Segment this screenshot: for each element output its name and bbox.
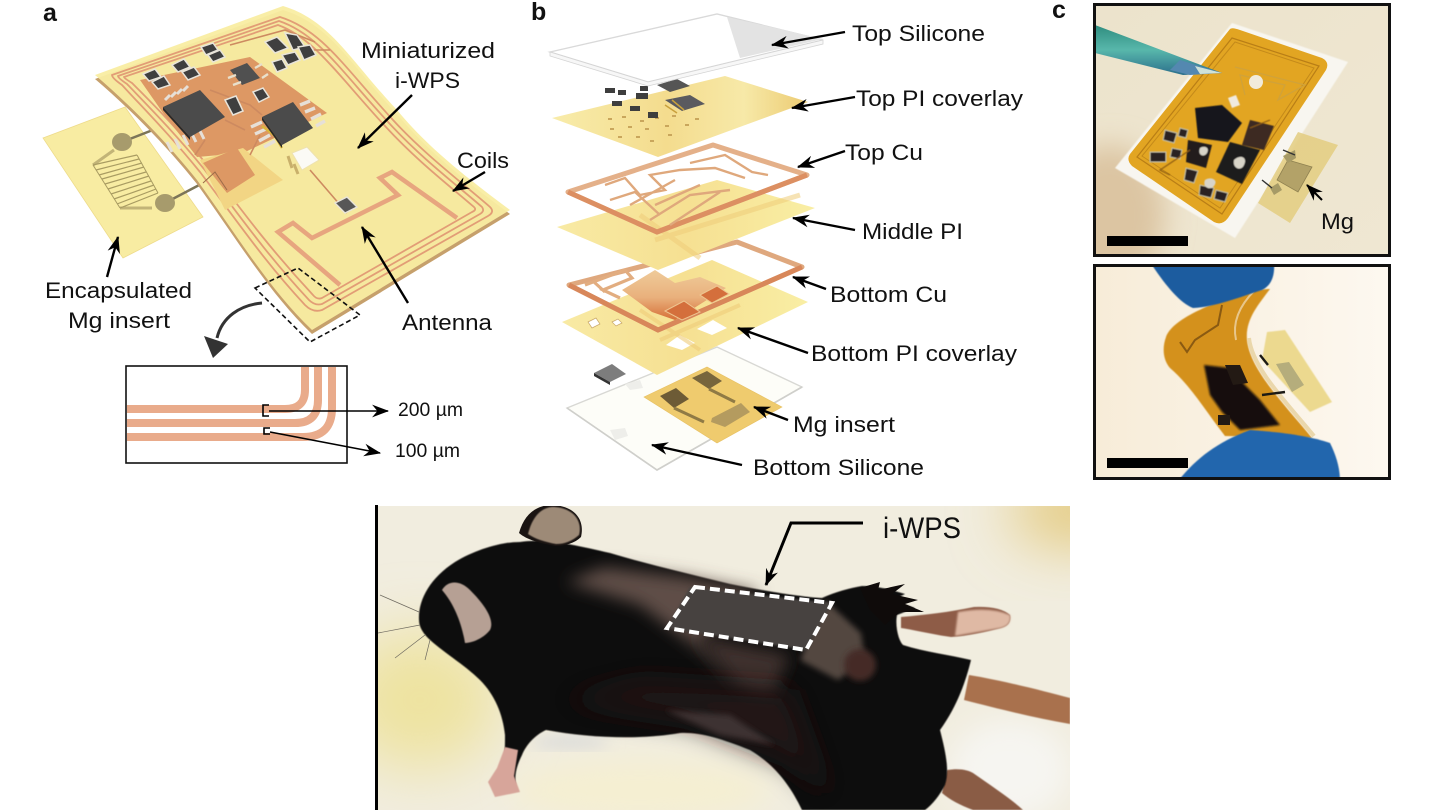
panel a: device illustration [43,0,510,463]
Mg film [1258,132,1338,223]
middle PI label and arrow: Middle PI [862,219,963,244]
hind leg lower [942,769,1023,810]
hind leg upper [901,607,1010,637]
silicone encapsulation [1115,23,1348,238]
coils label: Coils [457,148,509,173]
photo: device bent between fingers [1094,262,1390,481]
layer: bottom PI coverlay [562,260,808,375]
encapsulated Mg insert film [43,107,203,258]
bottom PI coverlay label and arrow: Bottom PI coverlay [811,341,1017,366]
coil spacing inset [126,366,463,463]
top PI coverlay label and arrow [792,86,1023,111]
photo background [378,506,1070,810]
Mg label and arrow [1307,185,1354,234]
implant area skin [667,587,832,650]
curved zoom arrow [204,303,262,358]
side ear [442,582,491,643]
lower body fur [594,674,819,796]
arrow: antenna [362,227,408,303]
Mg insert label and arrow: Mg insert [793,412,895,437]
fur tuft [864,582,924,616]
integrated circuit 1 [163,86,225,152]
antenna [278,172,457,285]
bottom silicone label and arrow [652,445,924,480]
200 micron callout: 200 µm [398,400,463,421]
Mg film [1262,330,1332,412]
small components [143,33,357,213]
bottom silicone label and arrow: Bottom Silicone [753,455,924,480]
miniaturized i-WPS label [361,38,495,93]
flexible circuit board [95,6,510,334]
hip skin [844,649,876,681]
layer: middle PI [557,180,815,270]
encapsulated Mg insert label: Encapsulated [45,278,192,303]
middle PI label and arrow [793,218,963,244]
Mg insert label and arrow [754,407,895,437]
lower grey fur [665,710,775,745]
100 micron callout [264,428,460,462]
layer: top Cu [568,145,807,232]
inner top ear [528,507,580,544]
tweezers [1095,25,1222,75]
layer: top silicone [550,14,823,86]
top silicone label and arrow: Top Silicone [852,21,985,46]
photo: device held by tweezers [1093,3,1391,257]
copper pad area [140,57,327,157]
100 micron callout: 100 µm [395,441,460,462]
arrow: coils [453,172,485,191]
encapsulated Mg insert label [45,278,192,333]
top Cu label and arrow: Top Cu [845,140,923,165]
chip [594,364,626,385]
arrow: encapsulated insert [107,237,118,277]
dashed implant outline [667,587,832,650]
layer: top PI coverlay [552,76,808,157]
whiskers [378,595,430,660]
arrow: miniaturized i-WPS [358,95,412,148]
top ear [519,505,582,546]
i-WPS callout: i-WPS [883,512,961,545]
shaved skin shoulder [566,567,760,690]
white sensor [288,147,319,174]
panel b: exploded layer stack [531,0,1023,480]
scale bar [1107,458,1188,468]
bottom Cu label and arrow [793,277,947,307]
coils [112,17,492,311]
layer: Mg insert [644,367,782,443]
blue gloves [1150,262,1274,308]
top PI components [605,79,705,118]
shaved skin under implant [704,636,792,696]
panel c: device photographs [1052,0,1390,481]
panel: mouse photograph [375,505,1070,810]
solder blob [1249,75,1263,89]
shaved skin flank [800,600,865,680]
top silicone label and arrow [772,21,985,46]
miniaturized i-WPS label: i-WPS [395,68,460,93]
yellow PI board [1128,28,1327,223]
antenna label: Antenna [402,310,493,335]
dashed zoom region [255,268,360,342]
layer: bottom Cu [569,242,802,330]
i-WPS callout [766,512,961,585]
photo frame edge [375,505,378,810]
Mg label and arrow: Mg [1321,209,1354,234]
200 micron callout [263,400,463,421]
dark circuit components [1204,365,1280,430]
encapsulated Mg insert label: Mg insert [68,308,170,333]
tail [964,675,1070,724]
mouse body [419,541,971,810]
layer: bottom silicone [567,347,802,470]
scale bar [1107,236,1188,246]
top PI coverlay label and arrow: Top PI coverlay [856,86,1023,111]
bottom PI coverlay label and arrow [738,328,1017,366]
lower copper pad [200,148,283,210]
miniaturized i-WPS label: Miniaturized [361,38,495,63]
circuit components [1150,95,1274,202]
integrated circuit 2 [251,101,325,148]
front paw [488,747,520,797]
top Cu label and arrow [798,140,923,167]
routing traces [195,30,347,213]
bottom Cu label and arrow: Bottom Cu [830,282,947,307]
bent PI board [1164,289,1312,438]
